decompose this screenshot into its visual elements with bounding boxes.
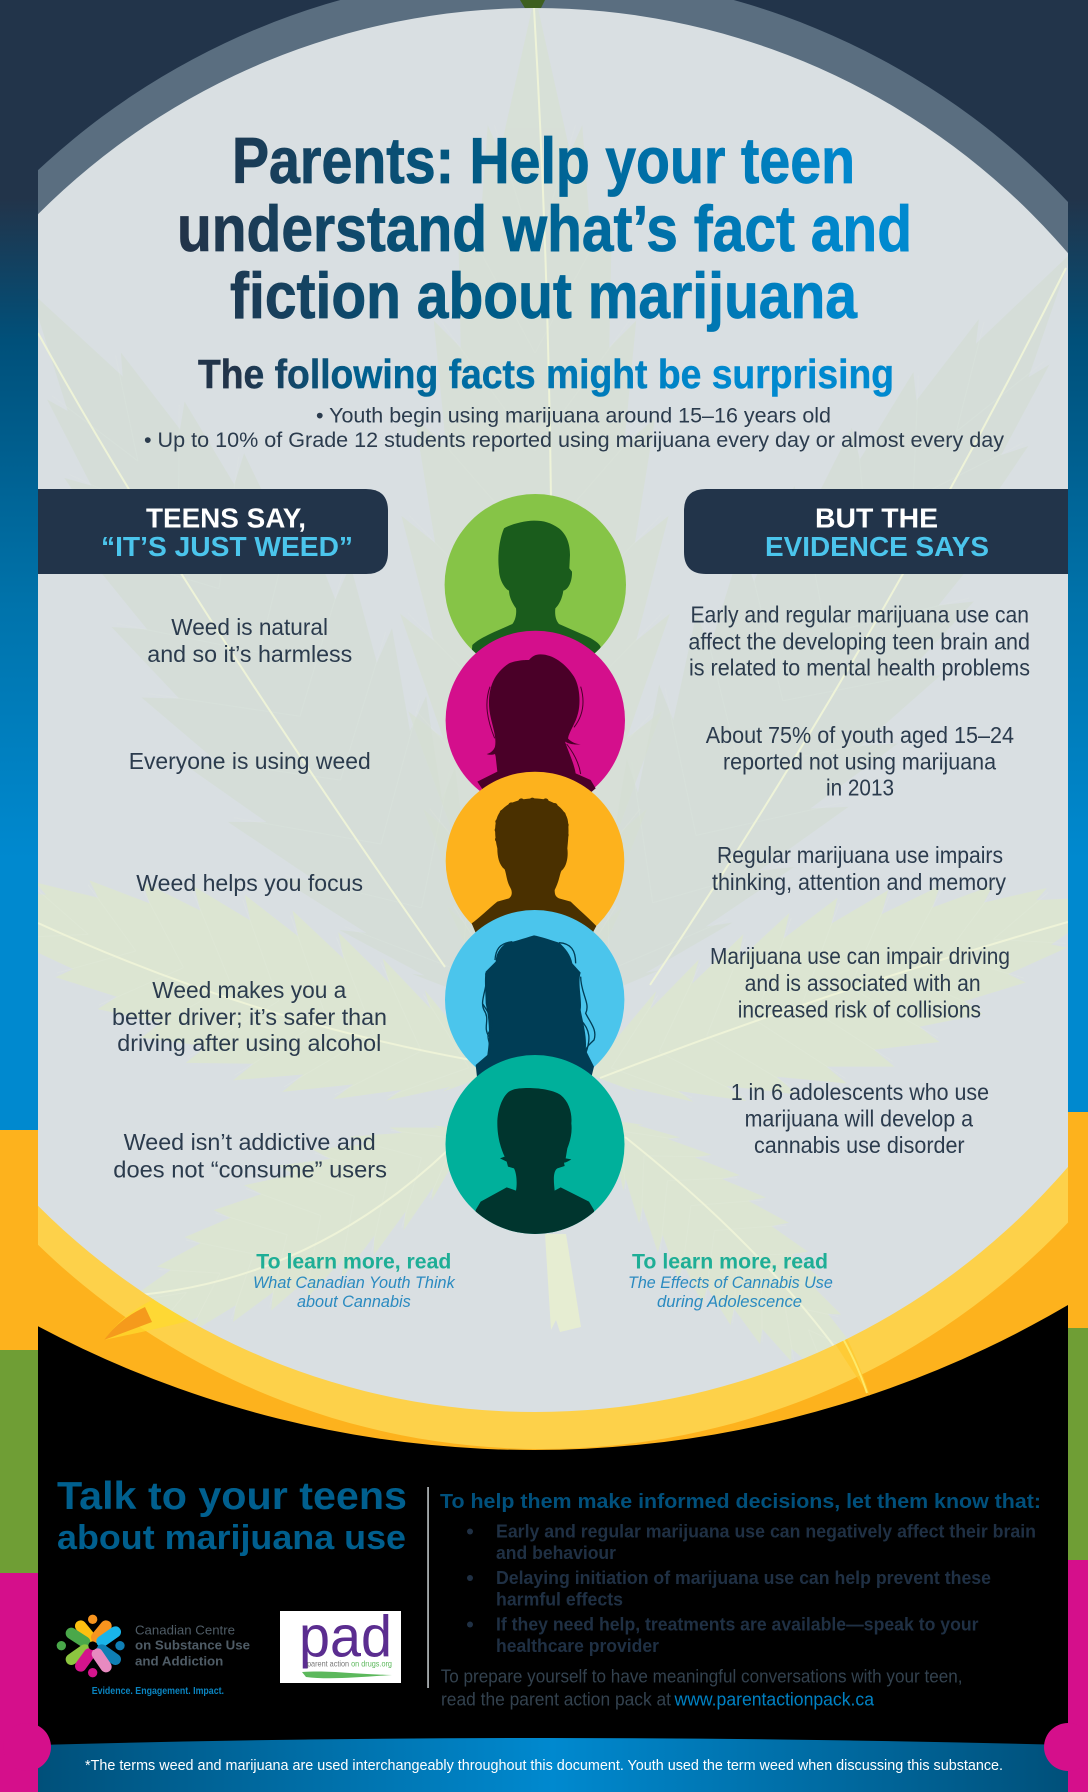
callout: learn more right: during Adolescence [657, 1292, 802, 1311]
myth: addiction: Weed isn’t addictive and [124, 1129, 376, 1155]
bullet list [467, 1521, 1036, 1656]
fact: 75 percent [706, 722, 1014, 801]
parent action pack note: read the parent action pack at [441, 1689, 671, 1710]
fact: thinking: thinking, attention and memory [712, 869, 1006, 895]
icon: teal circle with short hair silhouette [446, 1055, 624, 1240]
logo: Canadian Centre on Substance Use and Addiction [57, 1615, 250, 1697]
myth: driving: Weed makes you a [152, 977, 346, 1003]
heading: talk to your teens: about marijuana use [57, 1519, 406, 1557]
fact: thinking: Regular marijuana use impairs [717, 842, 1003, 868]
panel: teens say header: TEENS SAY, [146, 503, 306, 534]
fact: brain: is related to mental health problems [689, 655, 1030, 681]
panel: teens say header: “IT’S JUST WEED” [101, 531, 353, 562]
panel: teens say header [38, 489, 388, 574]
myth: natural: Weed is natural [171, 614, 328, 640]
ccsa name: on Substance Use [135, 1637, 250, 1652]
fact: 75 percent: About 75% of youth aged 15–24 [706, 722, 1014, 748]
icon: magenta circle with female silhouette [446, 631, 625, 810]
footer band [38, 1738, 1068, 1792]
fact: driving: Marijuana use can impair driving [710, 943, 1010, 969]
callout: learn more right [628, 1251, 833, 1311]
logo: parent action on drugs: parent action on drugs.org [307, 1658, 392, 1668]
ccsa name: Canadian Centre [135, 1622, 235, 1637]
icon: orange circle with curly hair silhouette [446, 772, 624, 950]
title [177, 124, 912, 332]
fact: brain: affect the developing teen brain and [688, 628, 1030, 654]
bullet list: and behaviour [496, 1542, 616, 1563]
bullet list: If they need help, treatments are available—speak to your [496, 1614, 978, 1635]
bullet list: harmful effects [496, 1589, 623, 1610]
myth: driving [112, 977, 387, 1056]
panel: evidence says header: BUT THE [815, 503, 938, 534]
fact: addiction: marijuana will develop a [745, 1106, 973, 1132]
myth: focus: Weed helps you focus [136, 870, 363, 896]
myth: driving: driving after using alcohol [117, 1030, 381, 1056]
fact: thinking [712, 842, 1006, 895]
panel: evidence says header [684, 489, 1068, 574]
title: understand what’s fact and [177, 192, 912, 265]
panel: key messages [440, 1490, 1041, 1710]
cannabis leaf background [38, 8, 1068, 1362]
callout: learn more left: What Canadian Youth Think [253, 1273, 456, 1292]
bullet list: Early and regular marijuana use can negatively affect their brain [496, 1521, 1036, 1542]
callout: learn more left: about Cannabis [297, 1292, 411, 1311]
heading: talk to your teens: Talk to your teens [57, 1475, 407, 1518]
fact: 75 percent: reported not using marijuana [723, 749, 996, 775]
parent action pack note: www.parentactionpack.ca [674, 1689, 875, 1710]
key facts [144, 404, 1005, 452]
callout: learn more right: To learn more, read [632, 1251, 828, 1274]
magenta tab left [3, 1723, 51, 1771]
fact: addiction: 1 in 6 adolescents who use [731, 1079, 989, 1105]
left colour strip [0, 0, 38, 1792]
parent action pack note [441, 1666, 962, 1710]
myth: natural [147, 614, 352, 667]
bullet list: healthcare provider [496, 1635, 659, 1656]
fact: driving [710, 943, 1010, 1023]
key messages heading: To help them make informed decisions, let them know that: [440, 1490, 1041, 1513]
icon: ccsa flower [57, 1615, 125, 1677]
parent action pack note: To prepare yourself to have meaningful conversations with your teen, [441, 1666, 962, 1687]
logo: parent action on drugs [280, 1605, 401, 1683]
magenta tab right [1044, 1723, 1088, 1771]
fact: driving: and is associated with an [745, 970, 981, 996]
panel: evidence column [688, 602, 1030, 1158]
fact: addiction: cannabis use disorder [754, 1132, 965, 1158]
fact: addiction [731, 1079, 989, 1158]
callout: learn more right: The Effects of Cannabis Use [628, 1273, 833, 1292]
fact: driving: increased risk of collisions [738, 997, 981, 1023]
fact: brain: Early and regular marijuana use can [690, 602, 1029, 628]
myth: natural: and so it’s harmless [147, 641, 352, 667]
icon: blue circle with wavy hair silhouette [445, 910, 624, 1089]
footnote: *The terms weed and marijuana are used interchangeably throughout this document. Youth used the term weed when discussing this substance. [85, 1757, 1003, 1774]
ccsa name: and Addiction [135, 1654, 223, 1669]
key facts: • Youth begin using marijuana around 15–16 years old [316, 404, 831, 427]
ccsa name [135, 1622, 250, 1669]
logo: parent action on drugs: pad [299, 1605, 392, 1670]
fact: brain [688, 602, 1030, 681]
title: fiction about marijuana [230, 259, 858, 332]
background panel with arcs and yellow ring [38, 0, 1068, 1450]
myth: driving: better driver; it’s safer than [112, 1004, 387, 1030]
key facts: • Up to 10% of Grade 12 students reported using marijuana every day or almost every day [144, 429, 1005, 452]
callout: learn more left: To learn more, read [256, 1251, 451, 1274]
panel: evidence says header: EVIDENCE SAYS [765, 531, 989, 562]
myth: everyone: Everyone is using weed [129, 748, 371, 774]
callout: learn more left [253, 1251, 456, 1311]
subtitle: The following facts might be surprising [198, 351, 894, 397]
myth: addiction [113, 1129, 387, 1182]
title: Parents: Help your teen [232, 124, 855, 197]
myth: addiction: does not “consume” users [113, 1156, 387, 1182]
bullet list: Delaying initiation of marijuana use can help prevent these [496, 1567, 991, 1588]
icon: green circle with male silhouette [444, 494, 626, 654]
heading: talk to your teens [57, 1475, 407, 1557]
ccsa tagline: Evidence. Engagement. Impact. [92, 1685, 224, 1697]
fact: 75 percent: in 2013 [826, 775, 894, 801]
panel: myths column [112, 614, 387, 1182]
right colour strip [1068, 0, 1088, 1792]
